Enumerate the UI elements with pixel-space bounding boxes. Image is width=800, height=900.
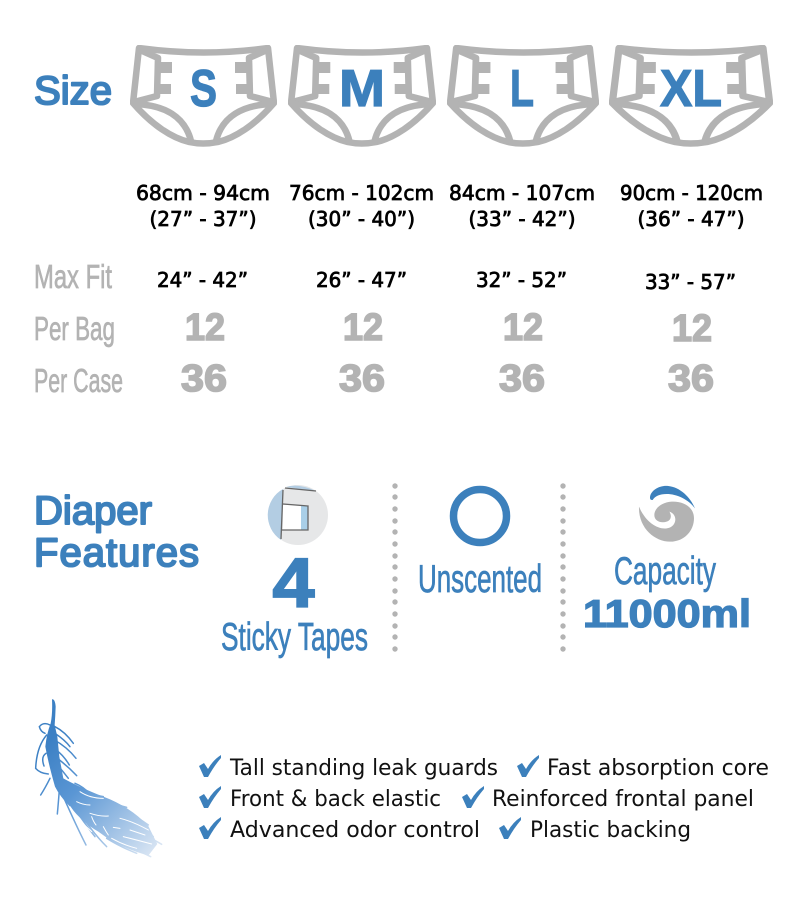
waist size: L: (33” - 42”)	[468, 207, 576, 231]
waist size: M	[289, 181, 434, 231]
per case values: 36	[181, 358, 227, 400]
per bag values: 12	[503, 307, 543, 349]
per bag values: 12	[185, 307, 225, 349]
waist size: S: 68cm - 94cm	[136, 181, 270, 205]
number: 4: 4	[272, 544, 315, 622]
per bag values: 12	[672, 308, 712, 350]
heading: Diaper Features	[34, 489, 199, 575]
row label: Max Fit: Max Fit	[34, 258, 112, 295]
waist size: L: 84cm - 107cm	[449, 181, 595, 205]
dotted divider 1	[392, 483, 398, 652]
label: Sticky Tapes: Sticky Tapes	[221, 616, 368, 659]
per bag values: 12	[343, 307, 383, 349]
row label: Per Bag: Per Bag	[34, 310, 115, 347]
max fit values: 33” - 57”	[645, 270, 736, 294]
waist size: L	[449, 181, 595, 231]
max fit values: 24” - 42”	[157, 268, 248, 292]
waist size: XL	[620, 181, 763, 231]
item: Fast absorption core: Fast absorption core	[547, 756, 769, 781]
waist size: XL: 90cm - 120cm	[620, 181, 763, 205]
item: Front & back elastic: Front & back elastic	[230, 787, 441, 812]
per case values: 36	[499, 358, 545, 400]
icon: unscented ring	[454, 490, 506, 542]
max fit values: 26” - 47”	[316, 268, 407, 292]
item: Advanced odor control: Advanced odor control	[230, 818, 480, 843]
diaper icon: M	[291, 48, 433, 144]
per bag values	[185, 307, 712, 350]
row label: Per Case: Per Case	[34, 362, 123, 399]
icon: capacity swirl	[639, 486, 695, 542]
waist size: M: 76cm - 102cm	[289, 181, 434, 205]
label: Unscented: Unscented	[418, 558, 542, 601]
dotted divider 2	[560, 483, 566, 652]
diaper icon: S	[133, 48, 274, 144]
item: Tall standing leak guards: Tall standing leak guards	[229, 756, 498, 781]
max fit values	[157, 268, 736, 294]
diaper icon: XL: XL	[660, 60, 722, 118]
per case values: 36	[668, 358, 714, 400]
per case values: 36	[339, 358, 385, 400]
icon: feather	[36, 699, 162, 857]
checklist	[199, 755, 769, 843]
per case values	[181, 358, 714, 400]
diaper icon: XL	[612, 48, 770, 144]
item: Plastic backing: Plastic backing	[530, 818, 691, 843]
waist size: M: (30” - 40”)	[308, 207, 415, 231]
item: Reinforced frontal panel: Reinforced frontal panel	[492, 787, 754, 812]
max fit values: 32” - 52”	[476, 268, 567, 292]
heading: Size: Size	[34, 69, 112, 113]
icon: sticky tape	[268, 485, 328, 545]
label: Capacity: Capacity	[614, 550, 716, 593]
waist size: XL: (36” - 47”)	[638, 207, 744, 231]
diaper icon: L: L	[510, 60, 534, 118]
value: 11000ml: 11000ml	[583, 593, 751, 636]
heading: Diaper Features: Diaper	[34, 489, 152, 533]
diaper icon: L	[450, 48, 596, 144]
diaper icon: S: S	[190, 60, 217, 118]
waist size: S: (27” - 37”)	[150, 207, 256, 231]
heading: Diaper Features: Features	[34, 531, 199, 575]
diaper icon: M: M	[339, 60, 385, 118]
waist size: S	[136, 181, 270, 231]
